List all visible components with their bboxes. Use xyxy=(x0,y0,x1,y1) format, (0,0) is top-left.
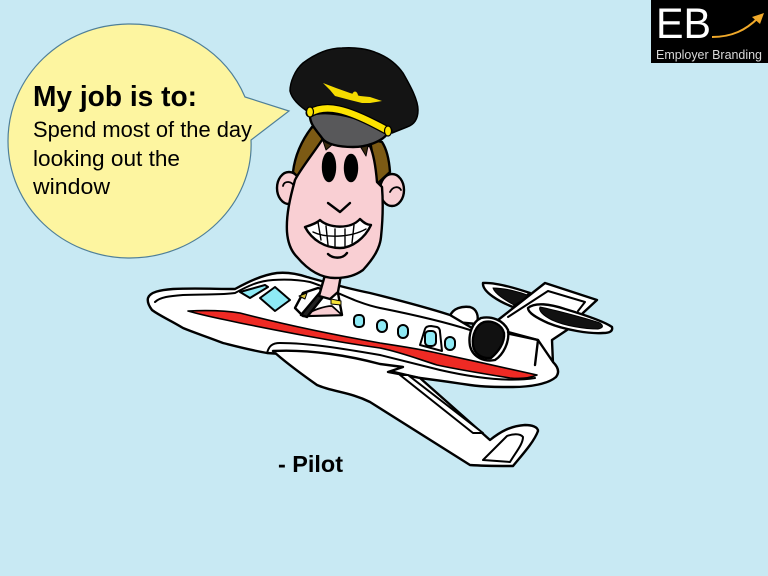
logo: Employer Branding: EB xyxy=(656,0,711,48)
torso xyxy=(295,288,342,317)
logo: Employer Branding xyxy=(651,0,768,63)
illustration: airplane xyxy=(148,273,612,466)
speech bubble xyxy=(8,24,289,258)
hat wings badge xyxy=(323,83,382,103)
ears xyxy=(277,172,404,206)
bubble body text: looking out the xyxy=(33,146,180,171)
smile xyxy=(305,219,371,248)
fuselage xyxy=(148,273,558,387)
bubble heading: My job is to: xyxy=(33,81,197,113)
hair fringe xyxy=(322,138,368,156)
red stripe xyxy=(188,311,537,378)
logo: Employer Branding: Employer Branding xyxy=(656,48,762,62)
cockpit windows xyxy=(240,285,290,311)
hair xyxy=(293,127,390,184)
front elevator xyxy=(528,304,612,333)
hat band xyxy=(310,108,388,131)
face xyxy=(287,140,383,278)
nose xyxy=(328,203,350,212)
neck xyxy=(319,275,341,299)
bubble body text: window xyxy=(32,174,111,199)
wing xyxy=(273,351,538,466)
rear elevator xyxy=(483,283,530,307)
hat visor xyxy=(310,113,388,147)
winglet inner xyxy=(483,434,523,462)
bubble body text: Spend most of the day xyxy=(33,117,253,142)
pilot hat xyxy=(290,48,418,147)
small hump xyxy=(450,307,478,324)
chin line xyxy=(328,253,347,258)
tail fin xyxy=(498,283,597,365)
illustration: pilot xyxy=(277,48,418,317)
eyes xyxy=(323,153,335,181)
fuselage inner line xyxy=(155,280,470,330)
caption: - Pilot xyxy=(278,451,343,477)
wing inner strip xyxy=(400,375,483,433)
engine xyxy=(469,318,538,365)
passenger windows xyxy=(354,315,455,351)
